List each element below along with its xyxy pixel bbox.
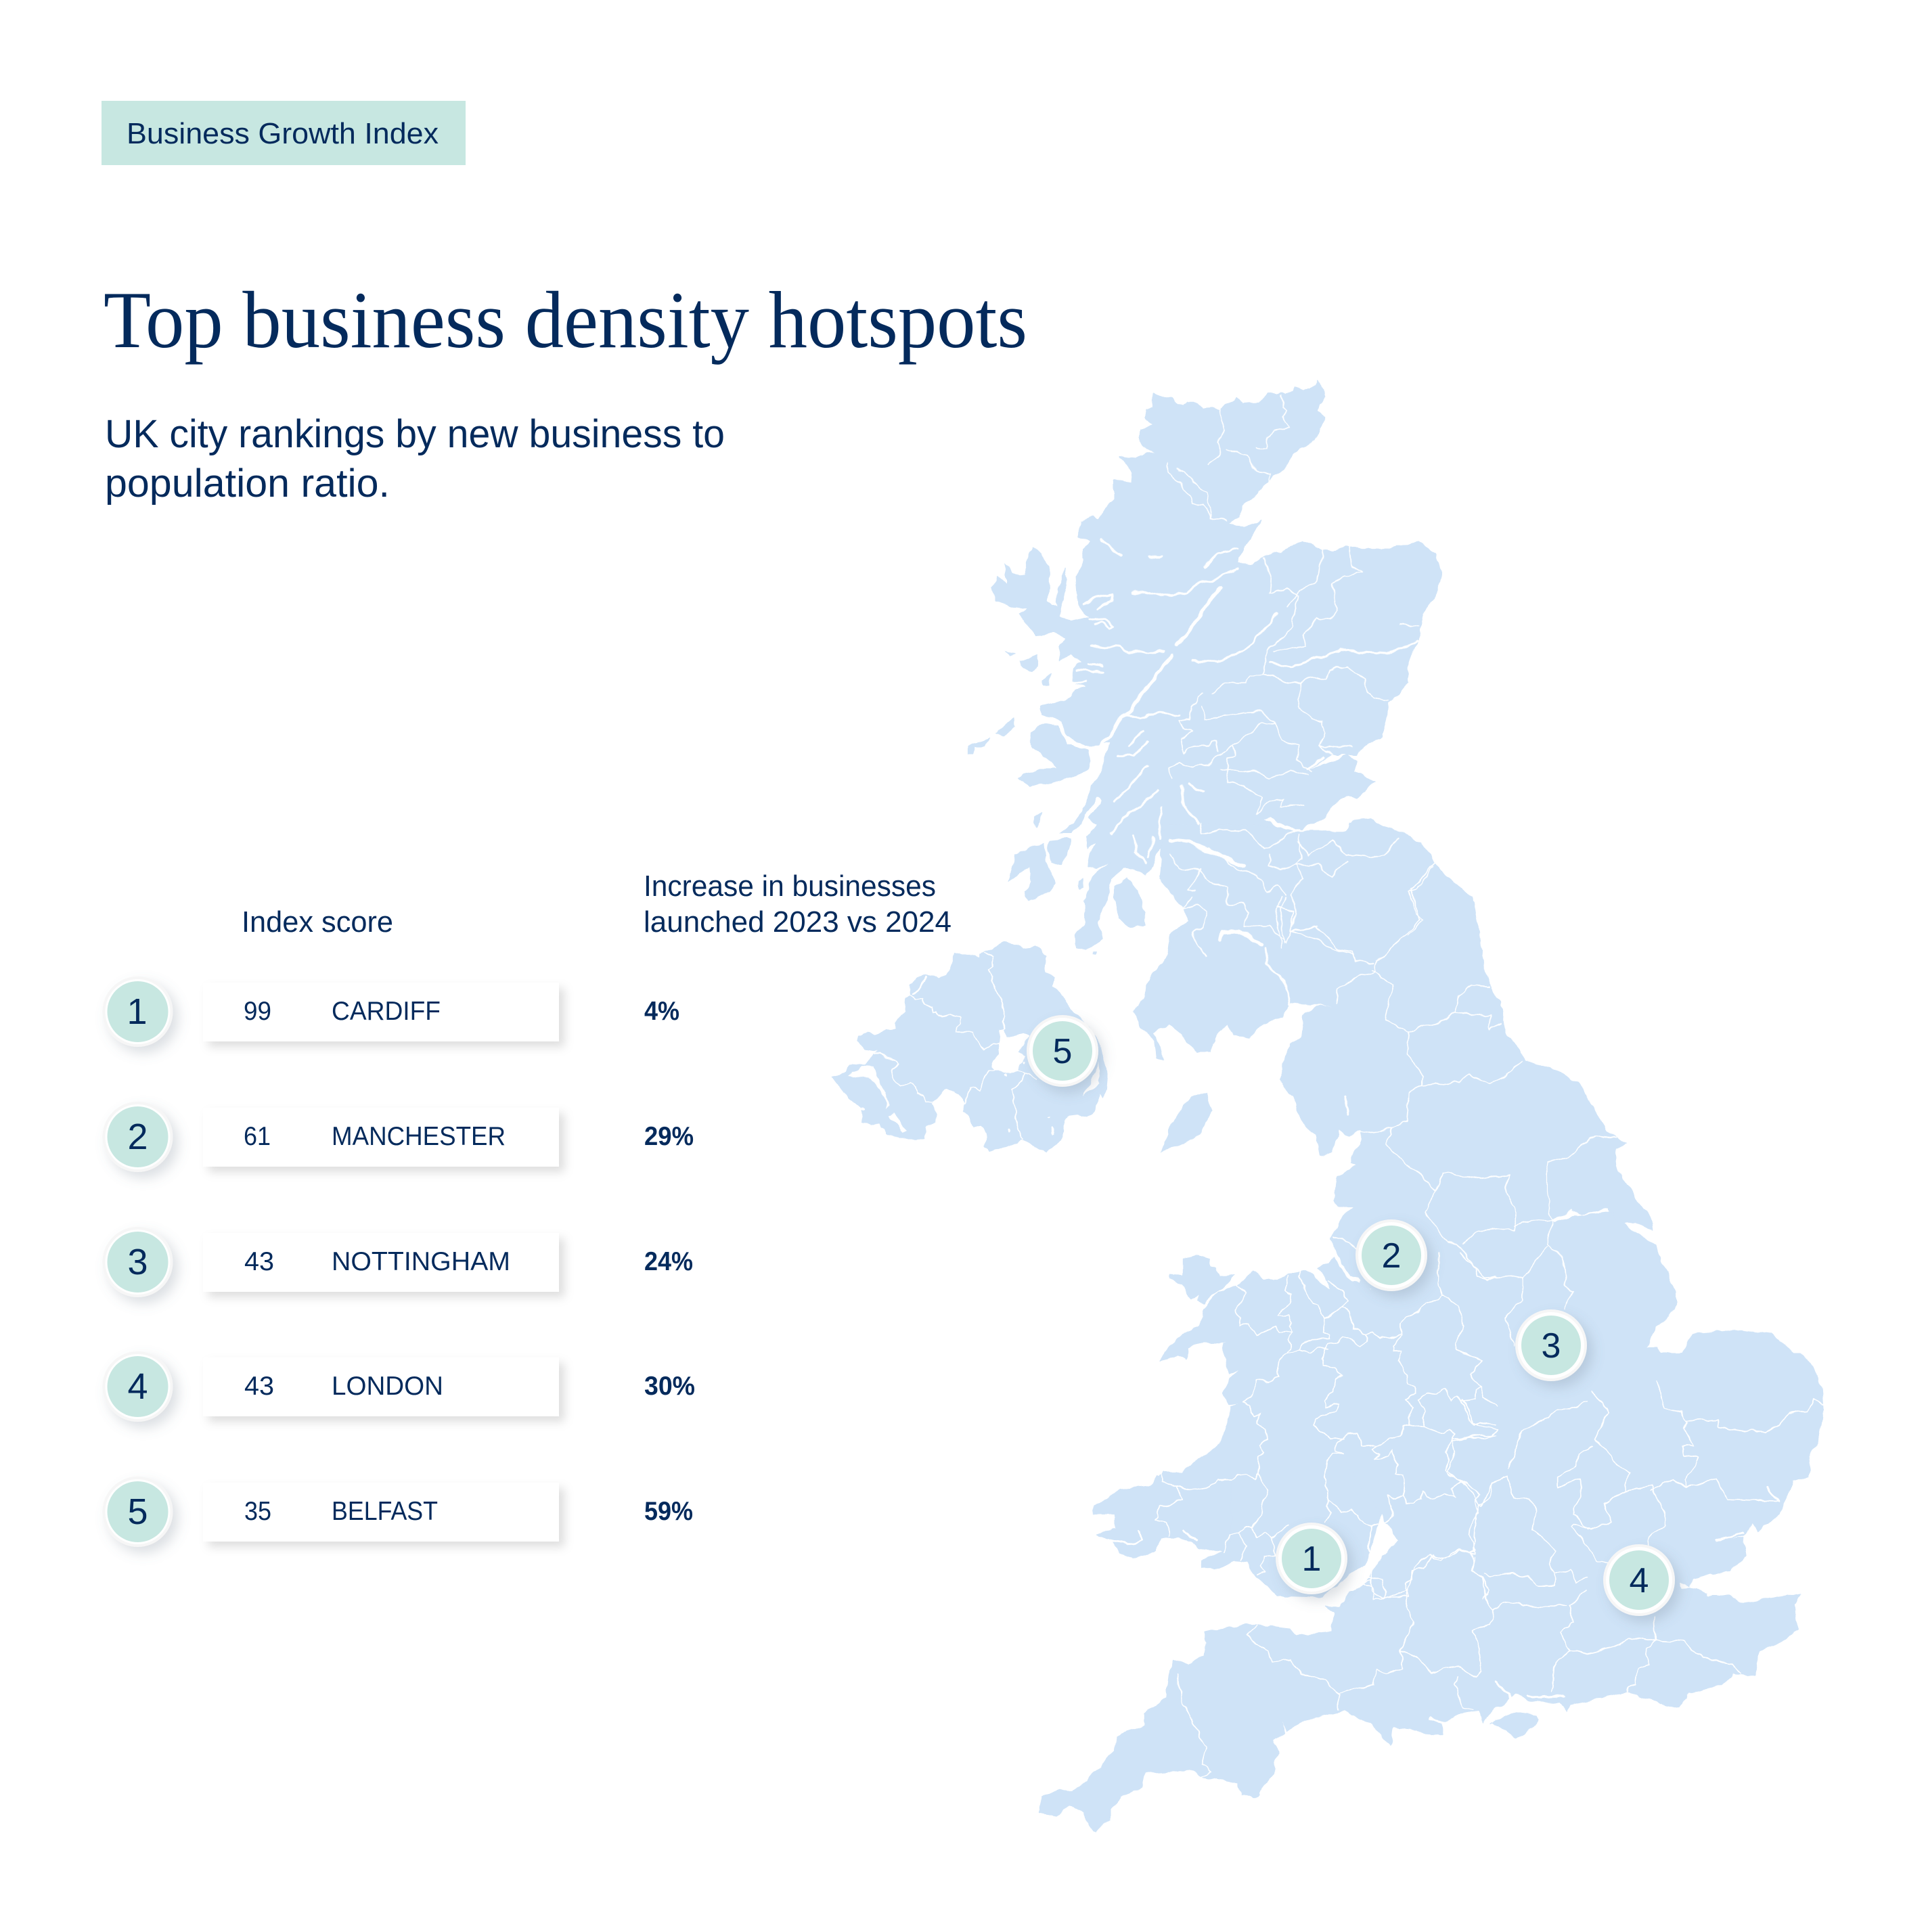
column heading: Increase in businesses <box>644 870 951 939</box>
column heading: Index score: Index score <box>242 905 393 939</box>
table row 1: Cardiff: 1 <box>127 991 148 1032</box>
table row 5: Belfast: 5 <box>127 1491 148 1532</box>
map: Isle of Man <box>1161 1093 1212 1151</box>
title: Top business density hotspots <box>104 275 1027 365</box>
table row 3: Nottingham: 24% <box>644 1247 693 1276</box>
map: Northern Ireland land <box>834 943 1108 1154</box>
map marker 1: Cardiff: 1 <box>1302 1540 1321 1579</box>
table row 2: Manchester: MANCHESTER <box>332 1122 506 1151</box>
tag: Business Growth Index: Business Growth Index <box>127 117 439 150</box>
map marker 3: Nottingham: 3 <box>1542 1326 1561 1366</box>
map marker 5: Belfast: 5 <box>1053 1032 1072 1071</box>
map: southern England boundaries <box>1110 1381 1823 1776</box>
map: southern England and Pembrokeshire land <box>1039 1353 1823 1833</box>
table row 2: Manchester: 29% <box>644 1122 694 1151</box>
map: southern Scotland and northern England land <box>1133 819 1819 1382</box>
table row 4: London: LONDON <box>332 1372 443 1401</box>
map marker 4: London: 4 <box>1630 1561 1649 1600</box>
table row 3: Nottingham: 43 <box>244 1247 274 1276</box>
map: United Kingdom regions <box>834 380 1823 1833</box>
table row 4: London: 43 <box>244 1372 274 1401</box>
table row 1: Cardiff: 4% <box>644 997 679 1026</box>
map: Scotland sea lochs and boundaries <box>1071 396 1433 1004</box>
table row 1: Cardiff <box>103 976 679 1047</box>
map marker 3: Nottingham <box>1515 1309 1587 1381</box>
map: Lough Neagh <box>990 1030 1029 1074</box>
table row 1: Cardiff: CARDIFF <box>332 997 441 1026</box>
map: Lough Erne <box>848 1067 890 1108</box>
subtitle <box>105 412 725 506</box>
map: Wales and Midlands boundaries <box>1154 1252 1496 1599</box>
table row 2: Manchester: 61 <box>244 1122 271 1151</box>
map marker 2: Manchester <box>1356 1219 1427 1291</box>
tag: Business Growth Index <box>102 101 466 165</box>
map: Scottish islands <box>968 652 1144 955</box>
table row 5: Belfast: 35 <box>244 1497 271 1526</box>
table row 4: London <box>103 1351 695 1422</box>
map marker 5: Belfast <box>1027 1015 1098 1087</box>
table row 3: Nottingham <box>103 1227 693 1297</box>
subtitle: UK city rankings by new business to <box>105 412 725 456</box>
map: Wales land <box>1130 1255 1392 1597</box>
table row 3: Nottingham: 3 <box>127 1242 148 1282</box>
map marker 1: Cardiff <box>1276 1523 1347 1594</box>
table row 2: Manchester: 2 <box>127 1117 148 1157</box>
map: northern England boundaries <box>1277 861 1617 1345</box>
map: Scotland land <box>968 380 1473 970</box>
table row 5: Belfast: BELFAST <box>332 1497 438 1526</box>
table row 5: Belfast <box>103 1477 693 1547</box>
subtitle: population ratio. <box>105 462 390 506</box>
column heading: Increase in businesses: Increase in businesses <box>644 870 936 903</box>
table row 2: Manchester <box>103 1102 694 1172</box>
table row 4: London: 4 <box>127 1366 148 1407</box>
table row 3: Nottingham: NOTTINGHAM <box>332 1247 510 1276</box>
table row 4: London: 30% <box>644 1372 695 1401</box>
table row 1: Cardiff: 99 <box>244 997 271 1026</box>
map marker 4: London <box>1603 1544 1675 1616</box>
map: Isle of Wight <box>1490 1713 1538 1737</box>
map marker 2: Manchester: 2 <box>1382 1236 1401 1276</box>
map: Anglesey <box>1169 1255 1235 1304</box>
table row 5: Belfast: 59% <box>644 1497 693 1526</box>
column heading: Increase in businesses: launched 2023 vs 2024 <box>644 905 951 939</box>
